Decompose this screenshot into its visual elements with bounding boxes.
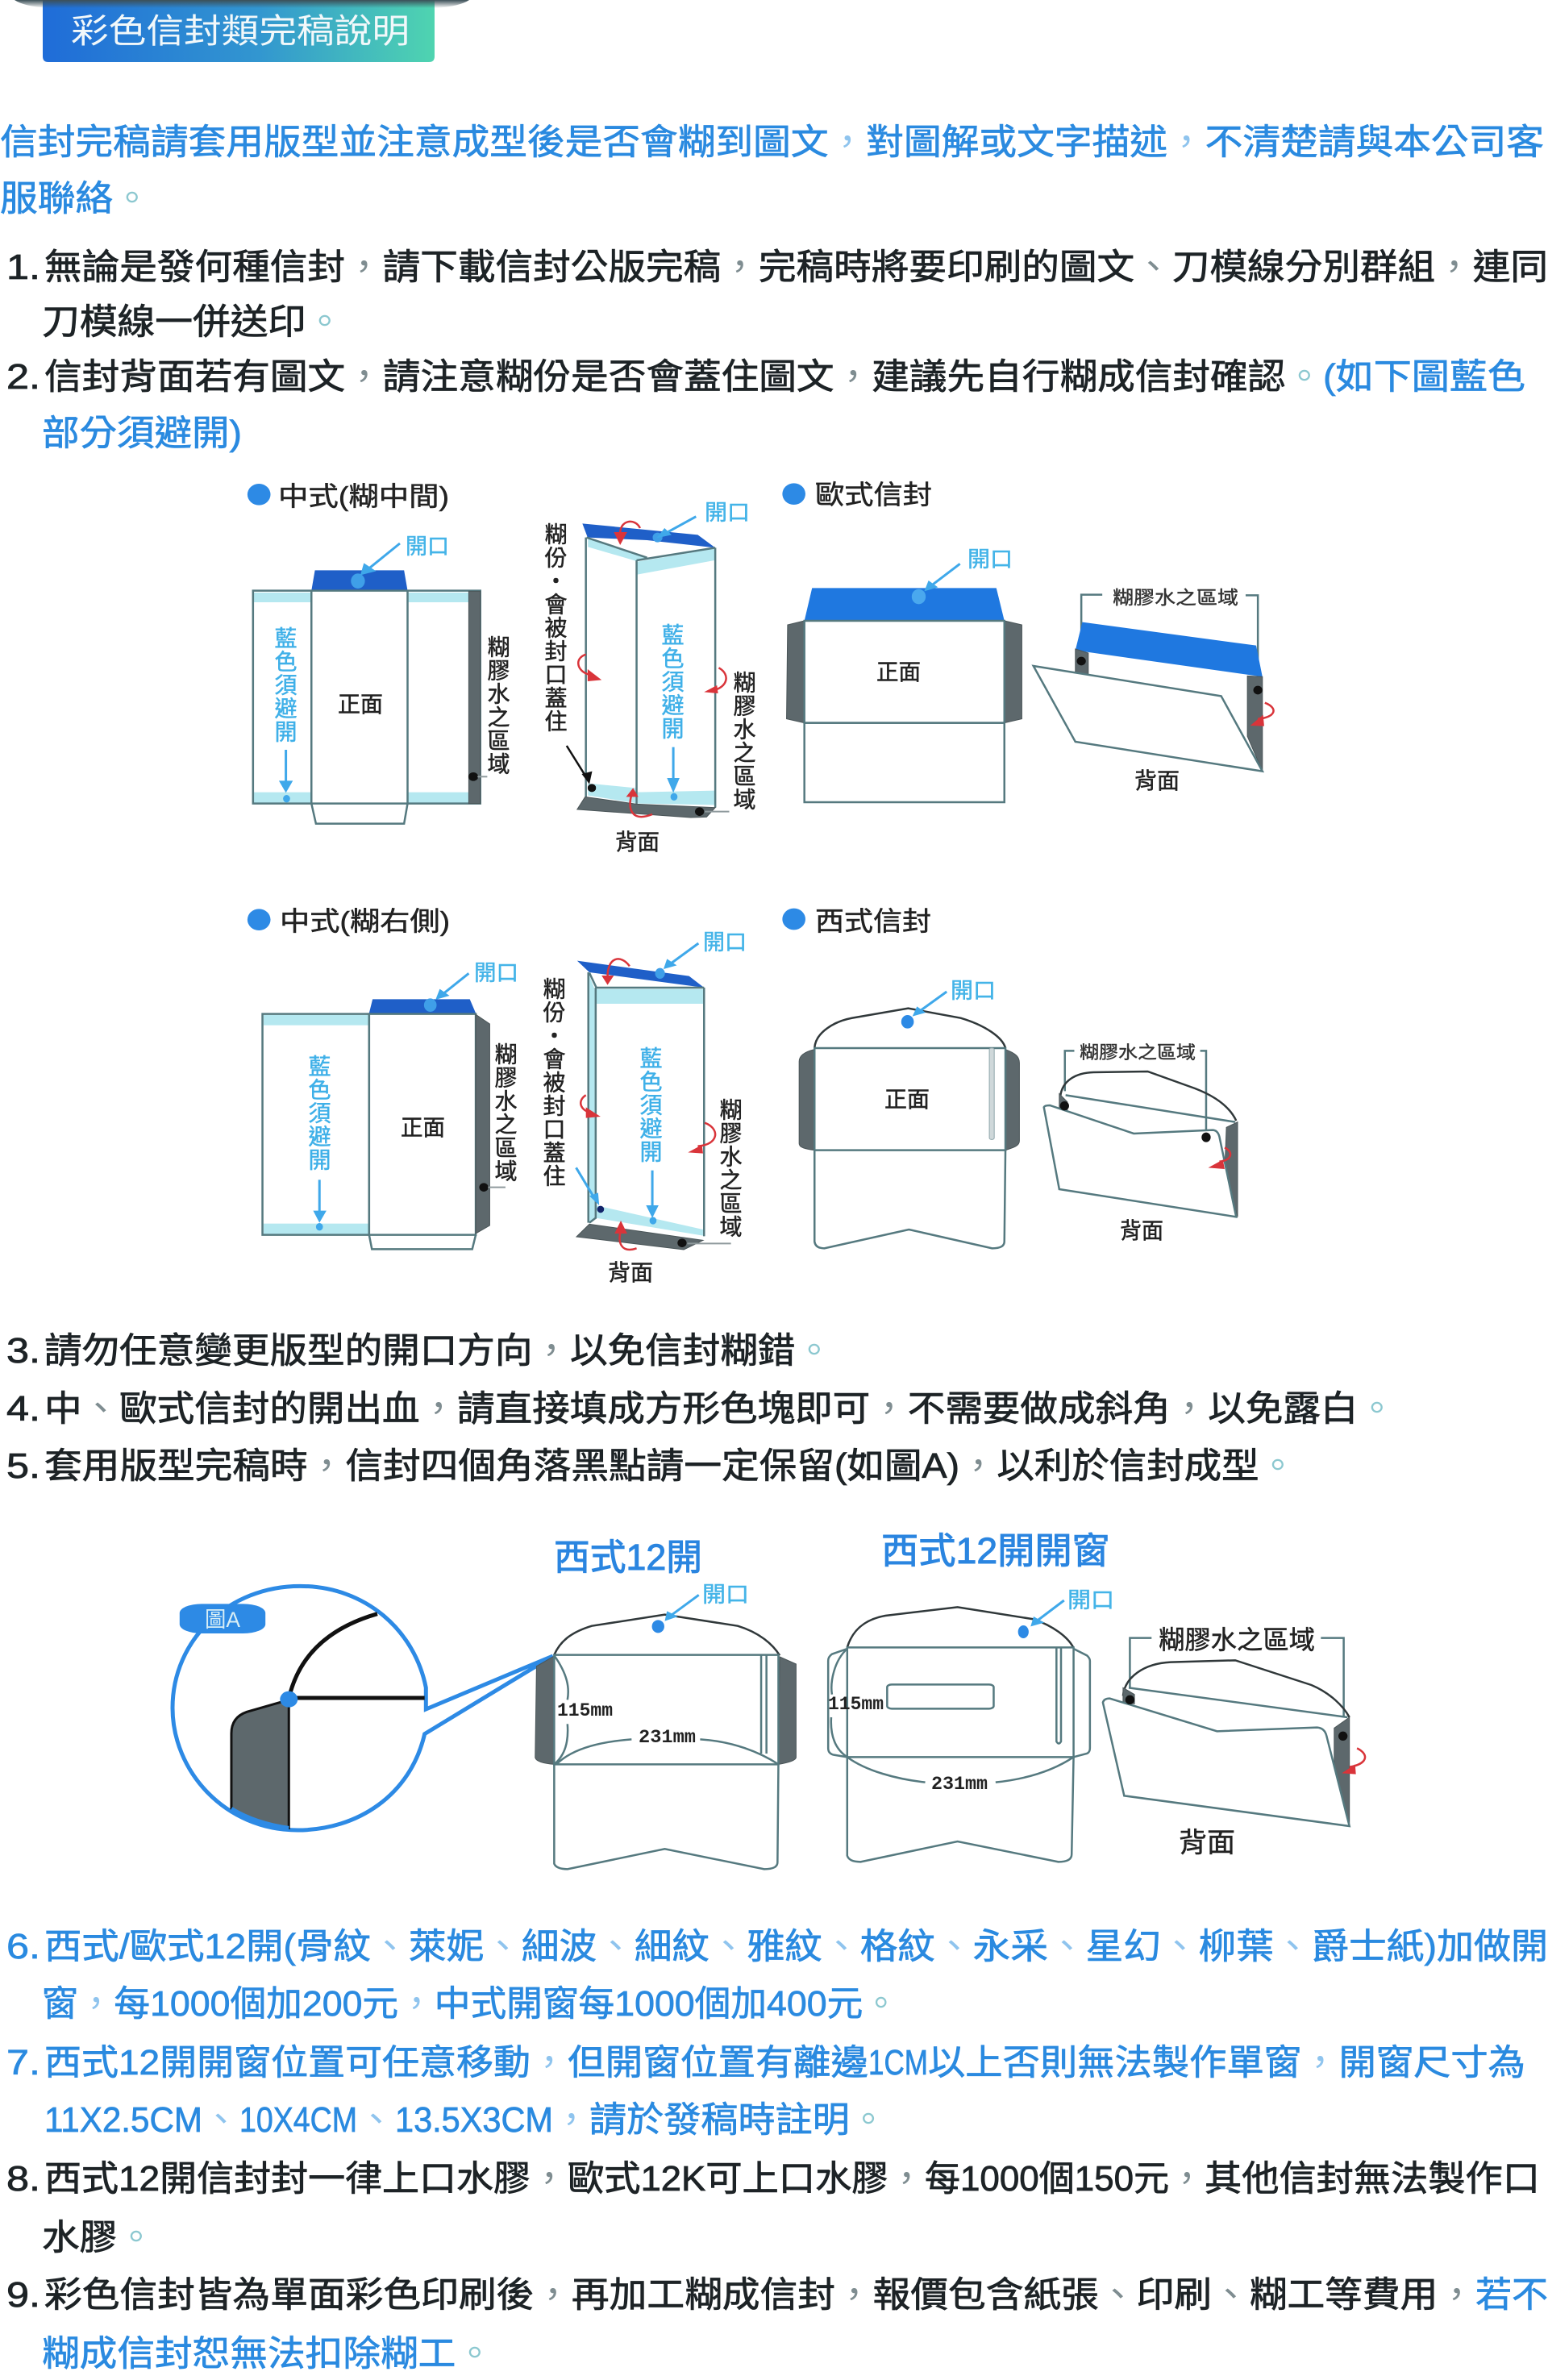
diagram: chinese style right glue front: 藍色須避開: [306, 1055, 331, 1171]
diagram: chinese style right glue back: 背面: [608, 1260, 653, 1285]
note 5: [6, 1446, 1296, 1486]
diagram: european envelope front: 開口: [968, 547, 1013, 572]
intro paragraph: 信封完稿請套用版型並注意成型後是否會糊到圖文 ，對圖解或文字描述 ，不清楚請與本公司客: [0, 123, 1544, 162]
note 7: 13.5X3CM: [395, 2100, 553, 2140]
note 2: 信封背面若有圖文 ，請注意糊份是否會蓋住圖文 ，建議先自行糊成信封確認 。: [44, 357, 1323, 397]
diagram: chinese style right glue back: [540, 930, 747, 1285]
diagram: western 12 window envelope: 開口: [1067, 1588, 1114, 1612]
diagram: chinese style right glue front: 糊膠水之區域: [492, 1042, 518, 1183]
note 6: [6, 1927, 1548, 2024]
note 7: ，: [553, 2100, 589, 2140]
note 8: 其他信封無法製作口: [1205, 2159, 1540, 2199]
note 7: 以上否則無法製作單窗 ，開窗尺寸為: [928, 2043, 1525, 2082]
diagram: chinese style right glue front: 中式(糊右側): [280, 906, 450, 936]
note 7: [6, 2043, 1525, 2140]
intro paragraph: [0, 123, 1544, 218]
note 5: 套用版型完稿時 ，信封四個角落黑點請一定保留: [44, 1446, 834, 1486]
note 3: 3.: [6, 1331, 40, 1371]
note 7: 請於發稿時註明 。: [589, 2100, 887, 2140]
diagram: chinese style centre glue back: 開口: [705, 501, 750, 525]
note 7: 11X2.5CM: [44, 2100, 202, 2140]
note 7: 7.: [6, 2043, 40, 2082]
note 8: 8.: [6, 2159, 40, 2199]
diagram: chinese style right glue front: [248, 906, 518, 1249]
diagram: european envelope back: 背面: [1134, 768, 1180, 793]
note 6: 窗，每1000個加200元，中式開窗每1000個加400元。: [42, 1984, 899, 2024]
note 4: 中、歐式信封的開出血 ，請直接填成方形色塊即可 ，不需要做成斜角 ，以免露白。: [44, 1389, 1396, 1429]
heading: western 12 window: 西式12開開窗: [881, 1530, 1109, 1571]
note 7: 10X4CM: [239, 2100, 357, 2140]
note 2: 部分須避開): [42, 414, 242, 453]
note 9: [6, 2275, 1548, 2374]
note 7: 、: [357, 2100, 395, 2140]
diagram: chinese style right glue front: 正面: [401, 1115, 445, 1140]
note 1: 刀模線一併送印 。: [42, 302, 343, 342]
note 7: 1CM: [868, 2043, 928, 2082]
diagram: chinese style centre glue back: 背面: [615, 830, 660, 855]
note 2: 2.: [6, 357, 40, 397]
diagram: european envelope back: [1034, 587, 1274, 793]
note 8: 水膠。: [42, 2218, 155, 2257]
note 6: 西式/歐式12開(: [44, 1927, 296, 1966]
note 9: 9.: [6, 2275, 40, 2315]
diagram: chinese style centre glue: 正面: [338, 692, 383, 717]
heading: western 12: 西式12開: [554, 1537, 702, 1578]
title banner: 彩色信封類完稿說明: [71, 12, 410, 50]
diagram: western 12 window envelope: [828, 1588, 1114, 1862]
diagram: western 12 envelope: [535, 1583, 796, 1869]
title banner: [15, 0, 469, 62]
diagram: western 12 back: [1103, 1625, 1365, 1858]
note 3: 請勿任意變更版型的開口方向 ，以免信封糊錯 。: [44, 1331, 833, 1371]
diagram: western envelope front: 正面: [884, 1087, 930, 1112]
diagram: western 12 envelope: 115mm: [557, 1700, 613, 1721]
note 9: 若不: [1475, 2275, 1548, 2315]
diagram: chinese style centre glue back: [542, 501, 756, 855]
diagram: chinese style centre glue back: 藍色須避開: [660, 623, 684, 740]
note 8: 西式12開信封封一律上口水膠 ，: [44, 2159, 568, 2199]
diagram: western 12 envelope: 開口: [702, 1583, 749, 1607]
diagram: western 12 back: 背面: [1179, 1828, 1235, 1858]
diagram: western envelope front: [782, 906, 1019, 1248]
note 1: 無論是發何種信封 ，請下載信封公版完稿 ，完稿時將要印刷的圖文 、刀模線分別群組 ，連同: [44, 248, 1548, 287]
intro paragraph: 服聯絡。: [0, 179, 151, 218]
diagram: chinese style centre glue: 開口: [406, 535, 449, 559]
diagram: western envelope front: 西式信封: [815, 906, 931, 936]
diagram: western 12 window envelope: 231mm: [931, 1774, 988, 1795]
diagram: european envelope front: 歐式信封: [815, 480, 932, 510]
note 6: 加做開: [1437, 1927, 1548, 1966]
diagram: chinese style right glue back: 糊膠水之區域: [718, 1098, 742, 1238]
diagram: western envelope front: 開口: [951, 979, 996, 1003]
diagram: chinese style centre glue: 糊膠水之區域: [485, 635, 510, 776]
note 1: [6, 248, 1548, 342]
diagram: western 12 envelope: 231mm: [639, 1727, 696, 1748]
note 8: 每1000個150元，: [925, 2159, 1205, 2199]
note 7: 但開窗位置有離邊: [568, 2043, 868, 2082]
diagram: western 12 back: 糊膠水之區域: [1159, 1625, 1315, 1654]
diagram: chinese style centre glue: 中式(糊中間): [278, 481, 449, 511]
diagram: chinese style right glue back: 開口: [703, 930, 747, 955]
callout: figure A magnifier: [173, 1586, 553, 1830]
diagram: chinese style right glue back: 糊份・會被封口蓋住: [540, 977, 566, 1188]
diagram: chinese style centre glue back: 糊膠水之區域: [730, 671, 756, 811]
note 2: [6, 357, 1525, 453]
diagram: chinese style centre glue back: 糊份・會被封口蓋住: [542, 522, 568, 733]
note 8: 歐式12K可上口水膠 ，: [568, 2159, 925, 2199]
diagram: chinese style centre glue: [248, 481, 510, 824]
note 1: 1.: [6, 248, 40, 287]
diagram: western envelope back: 糊膠水之區域: [1080, 1042, 1196, 1063]
diagram: western envelope back: [1044, 1042, 1238, 1243]
diagram: chinese style right glue back: 藍色須避開: [637, 1046, 663, 1163]
note 5: (如圖A): [834, 1446, 959, 1486]
diagram: chinese style right glue front: 開口: [474, 961, 518, 985]
note 7: 西式12開開窗位置可任意移動 ，: [44, 2043, 568, 2082]
note 8: [6, 2159, 1540, 2257]
note 9: 糊成信封恕無法扣除糊工 。: [42, 2334, 493, 2374]
note 6: 骨紋、萊妮、細波、細紋、雅紋、格紋、永采、星幻、柳葉、爵士紙): [296, 1927, 1437, 1966]
note 6: 6.: [6, 1927, 40, 1966]
diagram: european envelope back: 糊膠水之區域: [1113, 587, 1238, 608]
diagram: european envelope front: [782, 480, 1022, 802]
note 9: 彩色信封皆為單面彩色印刷後 ，再加工糊成信封 ，報價包含紙張 、印刷、糊工等費用 ，: [44, 2275, 1475, 2315]
callout: figure A magnifier: 圖A: [205, 1608, 240, 1632]
diagram: chinese style centre glue: 藍色須避開: [273, 626, 297, 743]
diagram: western envelope back: 背面: [1120, 1218, 1163, 1243]
note 5: ，以利於信封成型 。: [959, 1446, 1296, 1486]
note 7: 、: [202, 2100, 239, 2140]
note 2: (如下圖藍色: [1323, 357, 1525, 397]
note 5: 5.: [6, 1446, 40, 1486]
diagram: western 12 window envelope: 115mm: [828, 1694, 884, 1715]
note 4: 4.: [6, 1389, 40, 1429]
diagram: european envelope front: 正面: [876, 659, 921, 684]
